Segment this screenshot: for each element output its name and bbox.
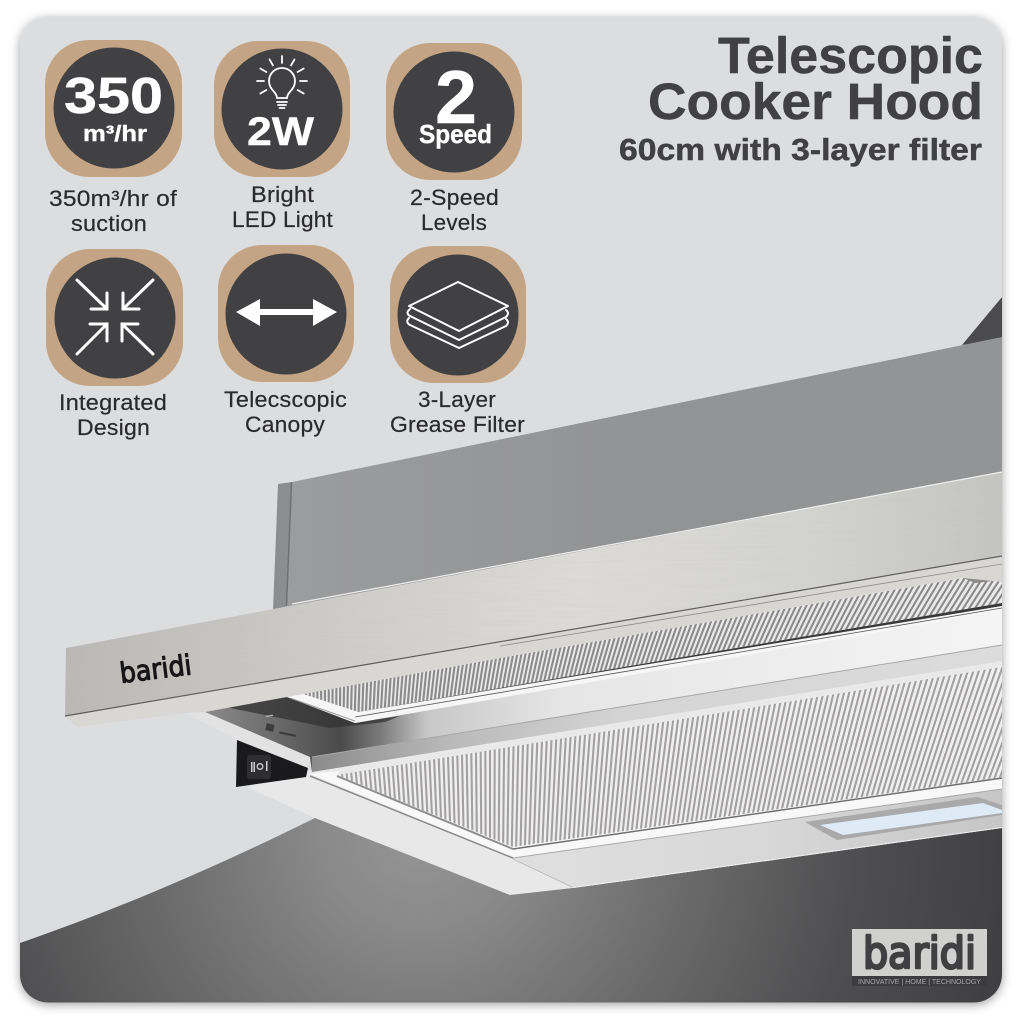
feature: grease filter: Grease Filter: [390, 412, 525, 437]
feature: suction: 350m³/hr of: [49, 186, 178, 211]
logo tagline: INNOVATIVE | HOME | TECHNOLOGY: [858, 977, 981, 986]
front fascia with logo: [65, 472, 1002, 727]
feature: LED light: 2W: [247, 110, 314, 154]
title line 1: Telescopic: [718, 27, 983, 84]
product scene: [20, 297, 1024, 1003]
icon: double arrow: [236, 299, 337, 326]
icon: inward arrows: [77, 280, 153, 354]
LED light panel: [805, 797, 1002, 840]
brand logo badge: [852, 928, 987, 986]
lower mesh filter: [310, 667, 1002, 859]
title block: [619, 27, 983, 167]
upper mesh filter: [287, 578, 1002, 723]
feature: telescopic canopy: Canopy: [245, 412, 325, 437]
fascia logo: baridi: [118, 648, 193, 690]
feature: suction: 350: [64, 67, 163, 124]
feature: speed levels: 2: [435, 55, 477, 139]
feature: suction: [45, 40, 182, 236]
feature: telescopic canopy: [218, 245, 354, 437]
feature: grease filter: [390, 246, 526, 437]
feature: grease filter: 3-Layer: [418, 387, 496, 412]
feature: integrated design: [46, 249, 183, 440]
logo wordmark: baridi: [863, 928, 976, 979]
feature: LED light: Bright: [251, 182, 314, 207]
feature: LED light: LED Light: [232, 207, 333, 232]
feature: speed levels: 2-Speed: [410, 185, 499, 210]
feature: speed levels: Levels: [421, 210, 487, 235]
worktop floor: [20, 810, 1002, 1003]
feature: integrated design: Design: [77, 415, 150, 440]
hood underside body: [247, 770, 1002, 895]
feature: suction: suction: [71, 211, 147, 236]
feature: integrated design: Integrated: [59, 390, 167, 415]
panel clips: [265, 714, 296, 737]
subtitle: 60cm with 3-layer filter: [619, 132, 982, 167]
back canopy panel: [273, 337, 1002, 610]
feature: LED light: [214, 41, 350, 232]
feature: telescopic canopy: Telecscopic: [224, 387, 347, 412]
icon: light bulb: [257, 56, 307, 108]
side lip wedge: [185, 712, 310, 768]
title line 2: Cooker Hood: [648, 73, 983, 130]
icon: filter layers: [407, 282, 508, 348]
rocker switch: [236, 740, 308, 787]
feature: suction: m³/hr: [83, 121, 148, 146]
dark wall wedge: [962, 297, 1002, 345]
control panel recess: [205, 610, 1002, 776]
feature: speed levels: [386, 43, 522, 235]
feature: speed levels: Speed: [419, 119, 492, 149]
